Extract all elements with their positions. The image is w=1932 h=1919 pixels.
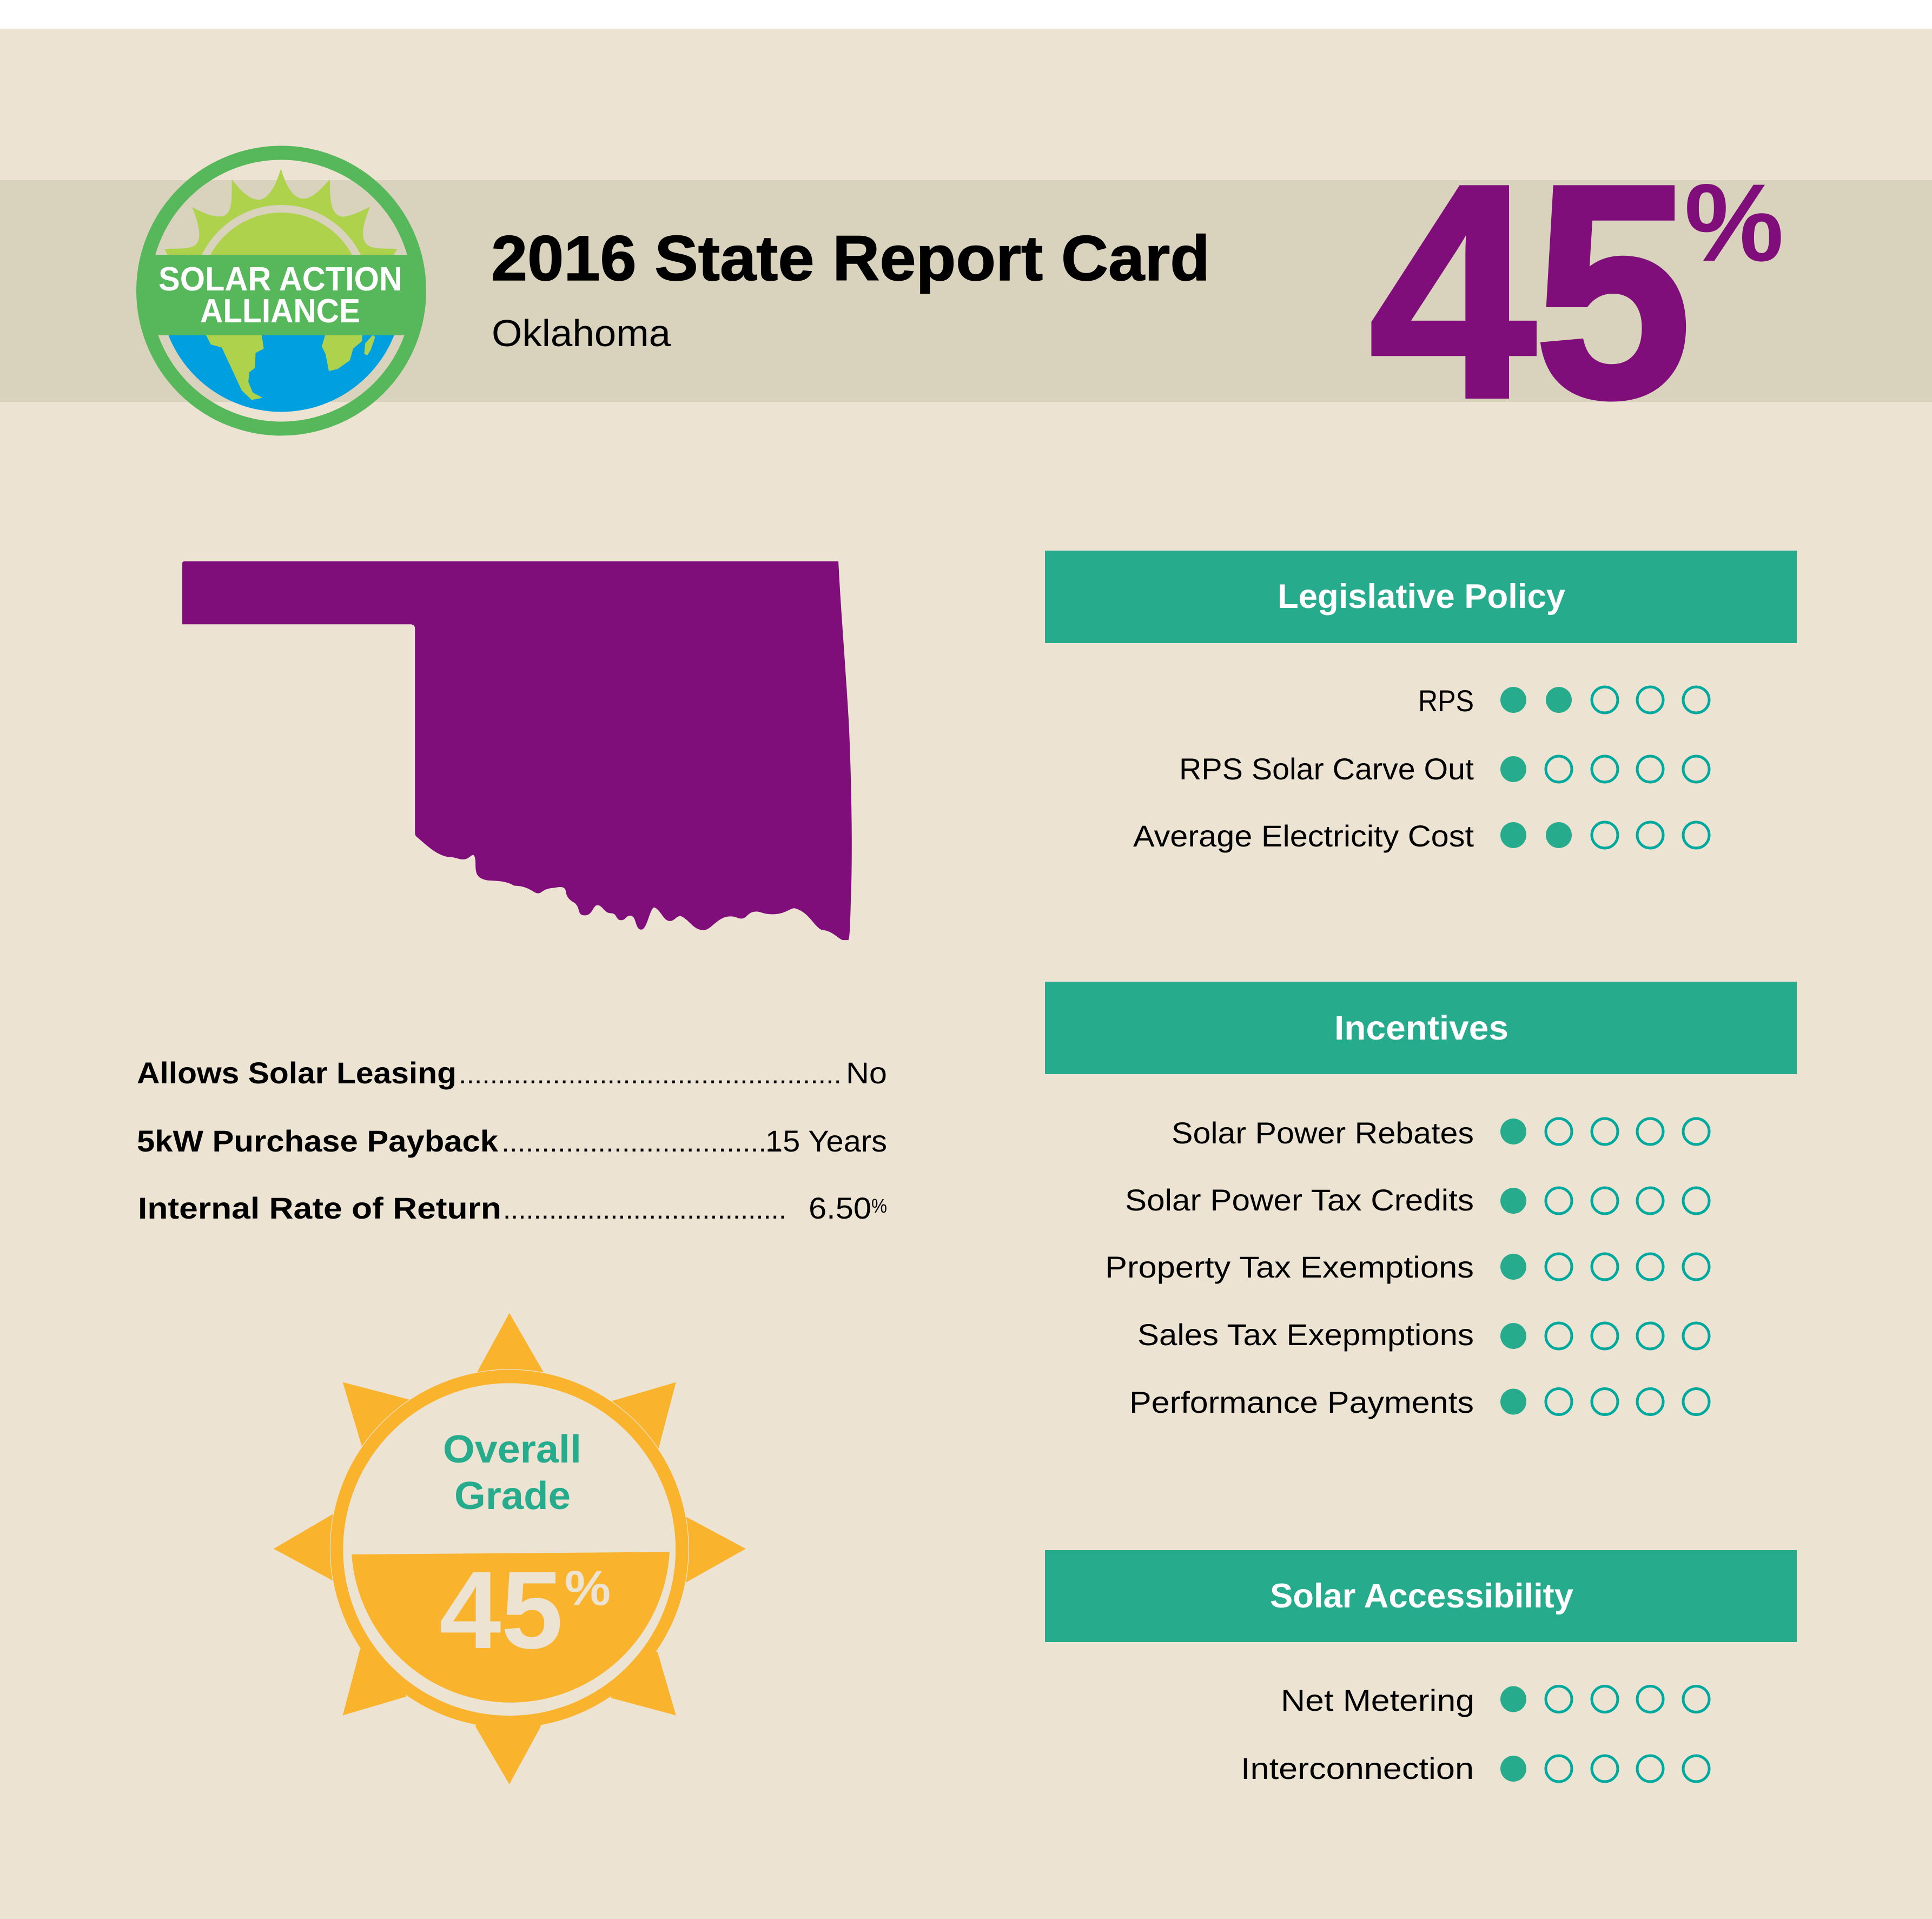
stat: internal rate of return [138, 1191, 887, 1225]
stat: 5kW purchase payback: 15 Years [765, 1124, 887, 1158]
heading bar [1045, 551, 1797, 643]
row: interconnection [1241, 1751, 1709, 1785]
map: Oklahoma silhouette [182, 561, 852, 940]
overall grade label: Grade [454, 1474, 571, 1518]
title: 2016 State Report Card [491, 223, 1210, 294]
subtitle: state name: Oklahoma [492, 312, 671, 354]
logo ring [143, 153, 419, 428]
row: performance payments [1129, 1385, 1709, 1419]
heading: Incentives [1334, 1009, 1508, 1047]
row: sales tax exepmptions [1137, 1318, 1709, 1352]
stat: internal rate of return: % [871, 1195, 887, 1217]
stat: allows solar leasing: ................................................. [459, 1059, 842, 1089]
heading bar [1045, 982, 1797, 1074]
headline score: 5 [1534, 122, 1692, 461]
stat: 5kW purchase payback: ................................... [501, 1127, 783, 1157]
stat: 5kW purchase payback [137, 1124, 887, 1158]
stat: internal rate of return: 6.50 [809, 1191, 871, 1225]
stats list [137, 1056, 887, 1225]
logo text [158, 261, 402, 330]
row: property tax exemptions: Property Tax Exemptions [1105, 1250, 1474, 1284]
panel: legislative policy [1045, 551, 1797, 853]
overall grade sun badge [274, 1313, 746, 1784]
grade fill segment [352, 1552, 670, 1703]
headline score: 4 [1369, 122, 1538, 461]
icon: sun rays [164, 169, 398, 255]
logo text: SOLAR ACTION [158, 261, 402, 298]
headline score [1369, 122, 1784, 461]
row: performance payments: Performance Payments [1129, 1385, 1474, 1419]
row: property tax exemptions [1105, 1250, 1709, 1284]
row: RPS solar carve out: RPS Solar Carve Out [1179, 752, 1474, 786]
panel: incentives [1045, 982, 1797, 1419]
row: solar power rebates [1172, 1116, 1709, 1150]
row: net metering [1281, 1683, 1709, 1717]
row: sales tax exepmptions: Sales Tax Exepmptions [1137, 1318, 1474, 1352]
row: solar power tax credits: Solar Power Tax Credits [1125, 1183, 1474, 1217]
stat: internal rate of return: ..................................... [503, 1194, 786, 1225]
row: average electricity cost: Average Electricity Cost [1133, 819, 1474, 853]
overall grade label: Overall [443, 1428, 581, 1471]
row: RPS solar carve out [1179, 752, 1709, 786]
stat: allows solar leasing: Allows Solar Leasing [137, 1056, 456, 1090]
overall grade value: % [565, 1561, 611, 1616]
row: solar power tax credits [1125, 1183, 1709, 1217]
stat: internal rate of return: Internal Rate of Return [138, 1191, 501, 1225]
logo banner [150, 255, 412, 335]
row: solar power rebates: Solar Power Rebates [1172, 1116, 1474, 1150]
row: RPS [1418, 684, 1709, 718]
heading bar [1045, 1550, 1797, 1642]
row: net metering: Net Metering [1281, 1683, 1474, 1717]
panel: solar accessibility [1045, 1550, 1797, 1785]
row: RPS: RPS [1418, 684, 1474, 718]
stat: 5kW purchase payback: 5kW Purchase Payback [137, 1124, 499, 1158]
sun rays [274, 1313, 746, 1784]
icon: globe [168, 335, 394, 412]
row: average electricity cost [1133, 819, 1709, 853]
dial inner disc [343, 1383, 676, 1716]
row: interconnection: Interconnection [1241, 1751, 1474, 1785]
logo: Solar Action Alliance [135, 153, 427, 428]
header band [0, 180, 1932, 402]
overall grade label [443, 1428, 581, 1518]
headline score: % [1684, 161, 1784, 284]
logo text: ALLIANCE [200, 293, 360, 330]
stat: allows solar leasing: No [846, 1056, 887, 1090]
overall grade value: 45 [439, 1549, 563, 1672]
heading: Legislative Policy [1278, 578, 1565, 616]
heading: Solar Accessibility [1270, 1577, 1573, 1615]
stat: allows solar leasing [137, 1056, 887, 1090]
